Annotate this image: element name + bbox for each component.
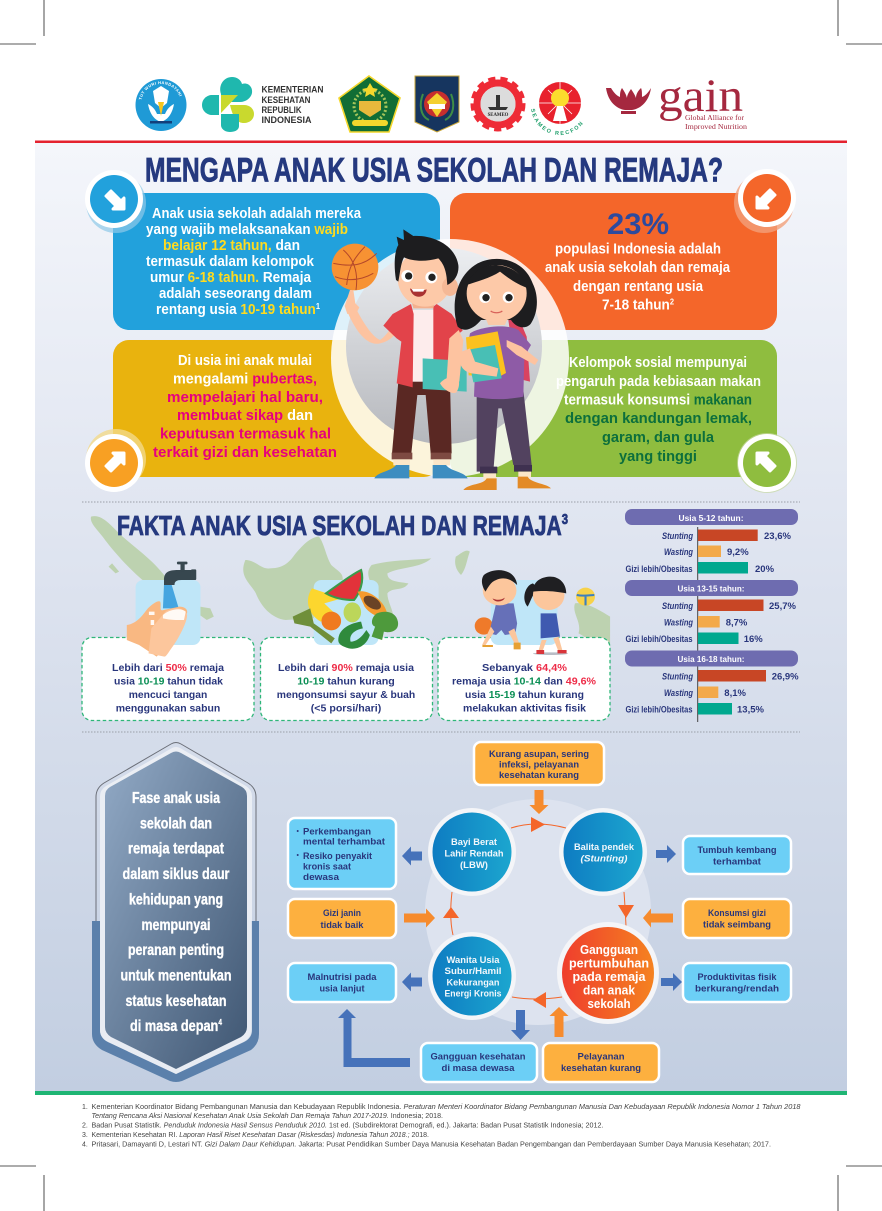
logo: Kementerian Kesehatan: KEMENTERIAN: [262, 84, 324, 94]
card: fruit and vegetable fact: Lebih dari 90% remaja usia: [278, 662, 414, 674]
box: late-life malnutrition: usia lanjut: [320, 984, 365, 994]
node: low birth weight: (LBW): [460, 860, 488, 871]
callout: life cycle phase hexagon: di masa depan: [130, 1018, 238, 1035]
chart group: age 13-15: [625, 580, 798, 645]
footnotes: Pritasari, Damayanti D, Lestari NT. Gizi Dalam Daur Kehidupan. Jakarta: Pusat Pendidikan Sumber Daya Manusia Kesehatan Badan Pengembangan dan Pemberdayaan Sumber Daya Manusia Kesehatan; 2017.: [92, 1142, 771, 1148]
footnotes: 2.: [82, 1122, 88, 1130]
node: women of reproductive age: Energi Kronis: [444, 988, 502, 1000]
background panel: [35, 143, 847, 1093]
card: fruit and vegetable fact: (<5 porsi/hari): [311, 702, 381, 714]
text: blue card: Anak usia sekolah adalah mereka: [152, 206, 362, 222]
chart group: age 16-18: 13,5%: [737, 704, 764, 716]
text: blue card: umur 6-18 tahun. Remaja: [150, 270, 312, 286]
footnotes: 1.: [82, 1104, 88, 1111]
node: women of reproductive age: Wanita Usia: [446, 955, 500, 966]
bar chart: nutrition status by age: [625, 509, 799, 722]
logo: Kementerian Agama: [339, 76, 400, 132]
chart group: age 5-12: 20%: [755, 564, 775, 575]
box: poor health service: kesehatan kurang: [561, 1063, 641, 1074]
box: unbalanced nutrition: [683, 899, 791, 938]
box: poor health service: Pelayanan: [578, 1052, 625, 1062]
chart group: age 5-12: [625, 509, 798, 575]
panel: blue definition card: [113, 193, 440, 330]
text: blue card: belajar 12 tahun, dan: [163, 238, 300, 254]
box: low intake, infection: Kurang asupan, sering: [489, 749, 589, 760]
card: handwashing fact: [82, 638, 254, 720]
callout: life cycle phase hexagon: kehidupan yang: [129, 892, 223, 908]
box: mental development: mental terhambat: [303, 836, 386, 848]
footnotes: Badan Pusat Statistik. Penduduk Indonesia Hasil Sensus Penduduk 2010. 1st ed. (Subdirektorat Demografi, ed.). Jakarta: Badan Pusat Statistik Indonesia; 2012.: [92, 1122, 604, 1130]
text: green card: termasuk konsumsi makanan: [564, 392, 752, 408]
box: low productivity: berkurang/rendah: [695, 984, 779, 994]
logo: GAIN: gain: [658, 70, 743, 122]
footnotes: Tentang Rencana Aksi Nasional Kesehatan Anak Usia Sekolah Dan Remaja Tahun 2017-2019. Indonesia; 2018.: [92, 1113, 443, 1120]
header logos: [136, 70, 747, 136]
stat: 23%: 23%: [607, 208, 669, 241]
callout: life cycle phase hexagon: dalam siklus daur: [122, 866, 230, 883]
node: growth disorder in adolescents: Gangguan: [580, 943, 638, 957]
logo: Tut Wuri Handayani: [136, 79, 186, 131]
box: adult health problems: di masa dewasa: [442, 1063, 515, 1074]
section title: FAKTA ANAK USIA SEKOLAH DAN REMAJA: [117, 510, 708, 541]
box: low intake, infection: [474, 742, 604, 785]
text: green card: pengaruh pada kebiasaan makan: [556, 374, 761, 390]
box: late-life malnutrition: Malnutrisi pada: [308, 972, 377, 983]
node: women of reproductive age: Kekurangan: [446, 978, 500, 988]
chart group: age 13-15: Wasting: [664, 618, 693, 628]
text: blue card: 1: [316, 302, 321, 311]
text: orange card: dengan rentang usia: [573, 279, 704, 295]
text: yellow card: mempelajari hal baru,: [167, 390, 323, 406]
text: yellow card: Di usia ini anak mulai: [178, 353, 312, 369]
text: orange card: 2: [670, 298, 675, 306]
footnotes: 4.: [82, 1142, 88, 1148]
icon: fruits and vegetables: [293, 570, 398, 649]
illustration: girl: [455, 259, 551, 490]
box: unbalanced nutrition: tidak seimbang: [703, 920, 771, 930]
box: low productivity: [683, 963, 791, 1002]
card: physical activity fact: Sebanyak 64,4%: [482, 662, 568, 674]
badge: orange arrow: [734, 169, 796, 233]
box: adult health problems: Gangguan kesehatan: [430, 1052, 526, 1062]
chart group: age 13-15: 25,7%: [769, 601, 796, 612]
callout: life cycle phase hexagon: sekolah dan: [140, 816, 212, 832]
footnotes: Kementerian Kesehatan RI. Laporan Hasil Riset Kesehatan Dasar (Riskesdas) Indonesia Tahun 2018.; 2018.: [92, 1132, 429, 1139]
chart group: age 13-15: 16%: [744, 634, 763, 645]
card: physical activity fact: melakukan aktivitas fisik: [463, 702, 586, 714]
chart group: age 5-12: 9,2%: [727, 547, 749, 558]
node: stunting: Balita pendek: [574, 842, 635, 853]
chart group: age 5-12: Wasting: [664, 547, 693, 558]
node: women of reproductive age: [428, 932, 516, 1020]
box: mental development: dewasa: [303, 872, 340, 883]
box: adult health problems: [421, 1043, 537, 1082]
node: stunting: [559, 808, 647, 896]
node: women of reproductive age: Subur/Hamil: [444, 966, 502, 977]
logo: shield: [415, 76, 459, 132]
arrows: orange inputs: [404, 790, 673, 1037]
text: blue card: rentang usia 10-19 tahun: [156, 302, 321, 318]
text: orange card: anak usia sekolah dan remaja: [545, 260, 731, 276]
text: blue card: adalah seseorang dalam: [159, 286, 312, 302]
box: low productivity: Produktivitas fisik: [698, 972, 777, 983]
chart group: age 13-15: Usia 13-15 tahun:: [678, 584, 745, 594]
footnotes: 3.: [82, 1132, 88, 1139]
cycle connectors: [443, 817, 634, 1008]
chart group: age 13-15: Gizi lebih/Obesitas: [626, 634, 692, 645]
section title: 3: [562, 511, 568, 528]
logo: Kementerian Kesehatan: KESEHATAN: [262, 95, 310, 105]
panel: green social card: [450, 340, 777, 477]
text: orange card: [545, 208, 731, 314]
node: growth disorder in adolescents: dan anak: [583, 984, 635, 998]
icon: handwashing: [127, 562, 200, 657]
logo: Kementerian Kesehatan: [202, 77, 324, 132]
text: green card: [556, 355, 761, 465]
icon: kids playing sports: [475, 570, 595, 655]
logo: SEAMEO RECFON: SEAMEO RECFON: [531, 108, 583, 136]
text: blue card: termasuk dalam kelompok: [146, 254, 315, 270]
card: fruit and vegetable fact: 10-19 tahun kurang: [297, 676, 395, 688]
box: impaired development: Tumbuh kembang: [698, 845, 777, 856]
box: poor fetal nutrition: tidak baik: [320, 920, 364, 931]
card: physical activity fact: [438, 638, 610, 720]
badge: blue arrow: [85, 170, 146, 233]
text: orange card: populasi Indonesia adalah: [555, 242, 721, 258]
chart group: age 16-18: Wasting: [664, 688, 693, 699]
box: poor health service: [543, 1043, 659, 1082]
box: impaired development: [683, 836, 791, 874]
callout: life cycle phase hexagon: Fase anak usia: [132, 790, 220, 807]
chart group: age 16-18: Stunting: [662, 672, 693, 682]
node: growth disorder in adolescents: pada remaja: [572, 970, 647, 984]
panel: yellow puberty card: [113, 340, 440, 477]
logo: SEAMEO: SEAMEO: [488, 113, 509, 118]
callout: life cycle phase hexagon: peranan penting: [128, 942, 224, 959]
box: poor fetal nutrition: [288, 899, 396, 938]
box: low intake, infection: kesehatan kurang: [499, 770, 579, 781]
box: unbalanced nutrition: Konsumsi gizi: [708, 908, 766, 919]
card: physical activity fact: remaja usia 10-14 dan 49,6%: [452, 676, 597, 688]
node: growth disorder in adolescents: [557, 922, 659, 1024]
box: impaired development: terhambat: [713, 856, 762, 868]
illustration: boy and girl: [332, 229, 551, 490]
card: fruit and vegetable fact: mengonsumsi sayur & buah: [277, 689, 415, 701]
text: yellow card: terkait gizi dan kesehatan: [153, 445, 337, 461]
text: yellow card: membuat sikap dan: [177, 408, 313, 424]
card: handwashing fact: usia 10-19 tahun tidak: [114, 676, 223, 688]
callout: life cycle phase hexagon: remaja terdapat: [128, 840, 224, 858]
logo: GAIN: Improved Nutrition: [685, 122, 747, 131]
text: blue card: [146, 206, 362, 318]
node: low birth weight: Bayi Berat: [451, 837, 498, 848]
text: yellow card: [153, 353, 337, 461]
logo: GAIN: Global Alliance for: [685, 113, 745, 122]
life cycle diagram: [288, 742, 791, 1082]
box: mental development: kronis saat: [303, 862, 352, 872]
card: handwashing fact: mencuci tangan: [129, 689, 207, 701]
logo: GAIN: [606, 70, 747, 131]
card: fruit and vegetable fact: [260, 638, 432, 720]
callout: life cycle phase hexagon: 4: [218, 1018, 222, 1027]
logo: Kementerian Kesehatan: REPUBLIK: [262, 105, 302, 115]
badge: green arrow: [737, 433, 797, 493]
chart group: age 16-18: 8,1%: [724, 688, 747, 699]
box: poor fetal nutrition: Gizi janin: [323, 908, 361, 919]
logo: Tut Wuri Handayani: TUT WURI HANDAYANI: [138, 81, 182, 100]
callout: life cycle phase hexagon: [92, 742, 259, 1082]
chart group: age 13-15: Stunting: [662, 601, 693, 612]
arrows: blue outcomes: [338, 845, 682, 1067]
text: green card: Kelompok sosial mempunyai: [569, 355, 747, 371]
node: growth disorder in adolescents: pertumbuhan: [569, 956, 649, 970]
box: low intake, infection: infeksi, pelayanan: [499, 760, 579, 770]
text: yellow card: keputusan termasuk hal: [160, 426, 331, 442]
chart group: age 5-12: Stunting: [662, 531, 693, 542]
logo: SEAMEO: [473, 79, 523, 129]
illustration: circle backdrop: [331, 239, 569, 477]
chart group: age 13-15: 8,7%: [726, 618, 748, 628]
chart group: age 16-18: Gizi lebih/Obesitas: [626, 704, 692, 716]
card: handwashing fact: Lebih dari 50% remaja: [112, 662, 224, 674]
badge: yellow arrow: [85, 429, 146, 492]
box: mental development: Perkembangan: [303, 826, 371, 838]
node: stunting: (Stunting): [580, 854, 628, 864]
card: physical activity fact: usia 15-19 tahun kurang: [465, 689, 584, 701]
illustration: boy: [332, 229, 468, 478]
footnotes: Kementerian Koordinator Bidang Pembangunan Manusia dan Kebudayaan Republik Indonesia. Peraturan Menteri Koordinator Bidang Pembangunan Manusia Dan Kebudayaan Republik Indonesia Nomor 1 Tahun 2018: [92, 1104, 801, 1111]
text: green card: yang tinggi: [619, 449, 697, 465]
node: growth disorder in adolescents: sekolah: [588, 997, 630, 1011]
box: mental development: [288, 818, 396, 889]
text: green card: dengan kandungan lemak,: [565, 411, 752, 427]
box: mental development: Resiko penyakit: [303, 851, 373, 862]
map of Indonesia: [91, 516, 610, 660]
chart group: age 16-18: 26,9%: [772, 672, 799, 682]
text: orange card: 7-18 tahun: [602, 298, 675, 314]
panel: orange population card: [450, 193, 777, 330]
chart group: age 16-18: Usia 16-18 tahun:: [678, 654, 745, 664]
text: green card: garam, dan gula: [602, 430, 715, 446]
callout: life cycle phase hexagon: status kesehatan: [126, 993, 226, 1010]
callout: life cycle phase hexagon: untuk menentukan: [120, 968, 232, 984]
card: handwashing fact: menggunakan sabun: [116, 702, 220, 714]
callout: life cycle phase hexagon: mempunyai: [142, 917, 210, 934]
text: yellow card: mengalami pubertas,: [173, 372, 317, 388]
logo: SEAMEO RECFON: [531, 82, 583, 136]
logo: Kementerian Kesehatan: INDONESIA: [262, 115, 312, 125]
chart group: age 5-12: Gizi lebih/Obesitas: [626, 564, 692, 575]
node: low birth weight: Lahir Rendah: [444, 848, 504, 860]
chart group: age 5-12: 23,6%: [764, 531, 791, 542]
box: late-life malnutrition: [288, 963, 396, 1002]
chart group: age 16-18: [625, 650, 799, 716]
footnotes: [82, 1104, 801, 1148]
chart group: age 5-12: Usia 5-12 tahun:: [678, 513, 744, 523]
text: blue card: yang wajib melaksanakan wajib: [146, 222, 348, 238]
node: low birth weight: [428, 808, 516, 896]
